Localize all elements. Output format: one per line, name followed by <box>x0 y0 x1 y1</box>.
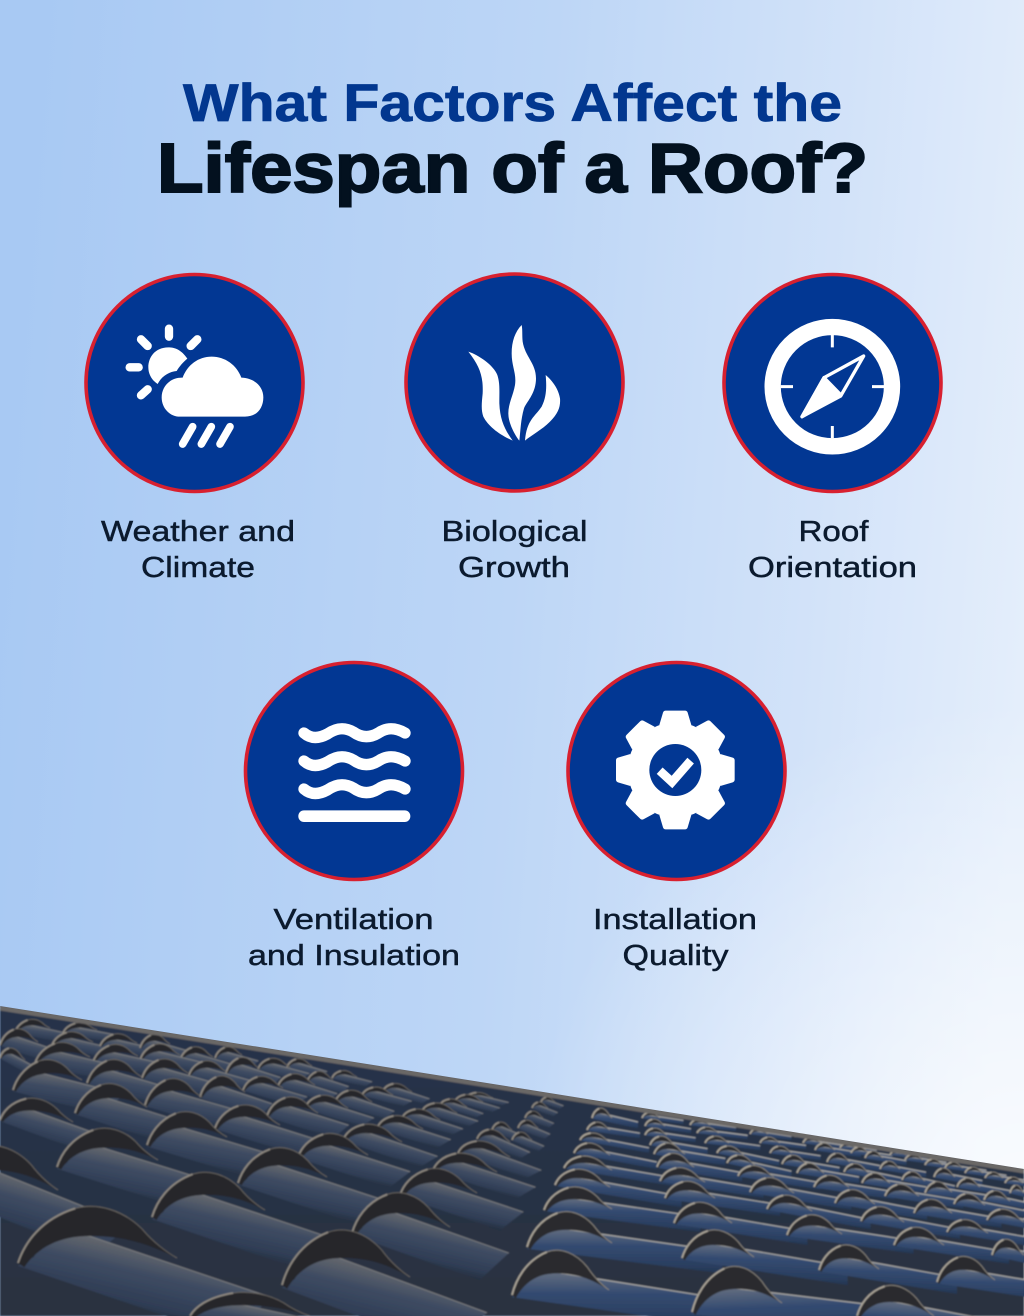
factor: biological growth <box>406 274 623 584</box>
label: and insulation: and Insulation <box>248 940 460 972</box>
label: orientation: Orientation <box>748 552 917 584</box>
icon: sun, cloud and rain <box>86 274 303 492</box>
roof photo: metal tile rows in perspective <box>0 1000 1024 1316</box>
label: quality: Quality <box>622 940 729 972</box>
icon: gear with check <box>568 662 785 880</box>
title <box>157 74 868 207</box>
icon: compass <box>724 274 941 492</box>
label: installation: Installation <box>593 904 757 936</box>
title: Lifespan of a Roof? <box>157 129 868 207</box>
label: growth: Growth <box>458 552 570 584</box>
icon: plant fronds <box>406 274 623 491</box>
factor: ventilation and insulation <box>246 662 462 972</box>
label: roof: Roof <box>798 516 870 548</box>
label: weather and: Weather and <box>101 516 295 548</box>
icon: air waves <box>246 662 462 880</box>
factor: installation quality <box>568 662 785 972</box>
title: What Factors Affect the <box>183 74 842 133</box>
label: climate: Climate <box>141 552 255 584</box>
label: biological: Biological <box>442 516 588 548</box>
factor: weather and climate <box>86 274 303 584</box>
factor: roof orientation <box>724 274 941 584</box>
label: ventilation: Ventilation <box>274 904 434 936</box>
